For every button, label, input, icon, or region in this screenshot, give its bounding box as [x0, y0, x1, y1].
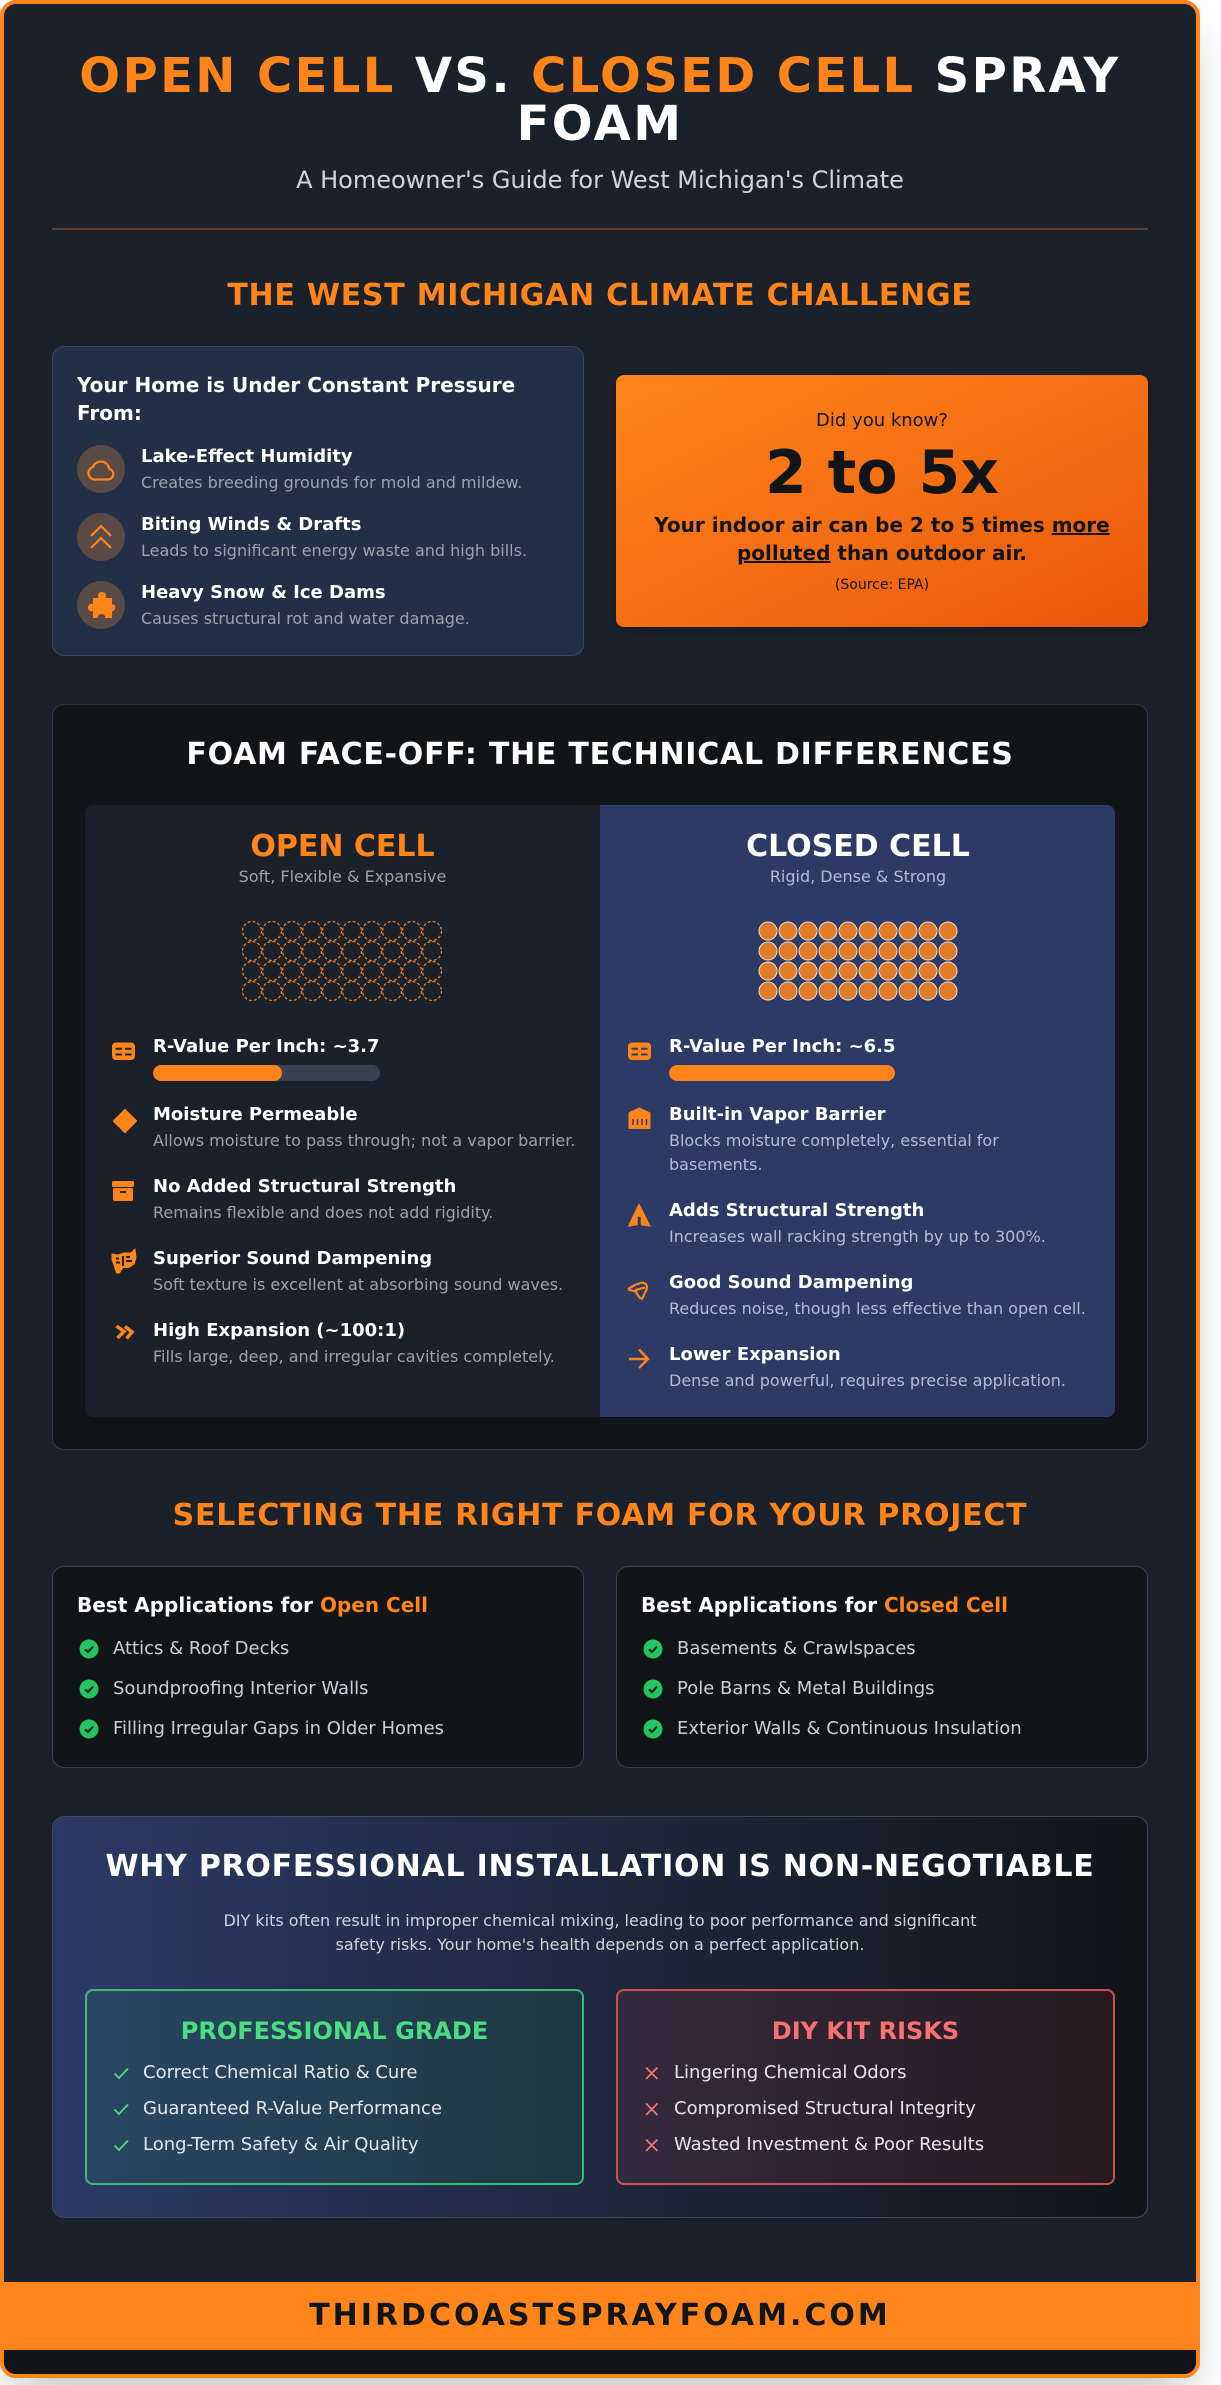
- risk item: Lingering Chemical Odors: [674, 2062, 907, 2083]
- risk item: [642, 2095, 1089, 2123]
- panel heading: From:: [77, 401, 142, 425]
- stat: expansion: [625, 1341, 1091, 1393]
- structure text: Remains flexible and does not add rigidity.: [153, 1203, 493, 1222]
- stat: vapor barrier: [628, 1104, 999, 1174]
- r-value text and bar: R-Value Per Inch: ~6.5: [669, 1036, 896, 1057]
- icon: cloud: [77, 445, 125, 493]
- text: snow: Causes structural rot and water damage.: [141, 609, 470, 628]
- structural strength text: Adds Structural Strength: [669, 1200, 924, 1221]
- benefit item: Guaranteed R-Value Performance: [143, 2098, 442, 2119]
- r-value text and bar: [669, 1036, 896, 1081]
- sound text: [153, 1248, 563, 1294]
- heading: professional installation: WHY PROFESSIONAL INSTALLATION IS NON-NEGOTIABLE: [105, 1849, 1095, 1884]
- intro text: DIY kits often result in improper chemical mixing, leading to poor performance and significant: [223, 1911, 977, 1930]
- icon: r-value: [628, 1042, 651, 1060]
- subtitle: A Homeowner's Guide for West Michigan's Climate: [296, 166, 904, 194]
- structural strength text: Increases wall racking strength by up to 300%.: [669, 1227, 1046, 1246]
- icon: diamond: [113, 1109, 137, 1133]
- structure text: [153, 1176, 493, 1222]
- source: (Source: EPA): [835, 577, 929, 593]
- text: winds: [141, 514, 527, 560]
- application item: [77, 1675, 559, 1703]
- panel heading: Best Applications for Closed Cell: [641, 1593, 1008, 1617]
- column tagline: Rigid, Dense & Strong: [770, 867, 946, 886]
- list: pressures: [77, 445, 527, 629]
- text: humidity: Lake-Effect Humidity: [141, 446, 353, 467]
- climate panels: [52, 346, 1148, 656]
- vapor barrier text: [669, 1104, 999, 1174]
- item: snow: [77, 581, 470, 629]
- big number: 2 to 5x: [765, 438, 999, 508]
- icon: double chevron up: [77, 513, 125, 561]
- application panels: [52, 1566, 1148, 1768]
- moisture text: [153, 1104, 575, 1150]
- icon: sound: [112, 1248, 136, 1274]
- stat: sound: [112, 1248, 563, 1294]
- vapor barrier text: basements.: [669, 1155, 762, 1174]
- column heading: OPEN CELL: [250, 829, 435, 864]
- column heading: CLOSED CELL: [746, 829, 970, 864]
- text: winds: Leads to significant energy waste and high bills.: [141, 541, 527, 560]
- stat: r-value: [112, 1036, 380, 1081]
- section: climate challenge: [52, 278, 1148, 656]
- application item: Attics & Roof Decks: [113, 1638, 289, 1659]
- sound text: Reduces noise, though less effective than open cell.: [669, 1299, 1086, 1318]
- text: snow: Heavy Snow & Ice Dams: [141, 582, 386, 603]
- diagram: open cell structure: [242, 921, 442, 1001]
- header: [52, 52, 1148, 230]
- expansion text: [153, 1320, 555, 1366]
- benefit item: Correct Chemical Ratio & Cure: [143, 2062, 417, 2083]
- footer band: website: [4, 2282, 1196, 2350]
- expansion text: Dense and powerful, requires precise application.: [669, 1371, 1066, 1390]
- application item: Pole Barns & Metal Buildings: [677, 1678, 935, 1699]
- structural strength text: [669, 1200, 1046, 1246]
- r-value text and bar: [153, 1036, 380, 1081]
- title: OPEN CELL VS. CLOSED CELL SPRAY FOAM: [79, 48, 1121, 152]
- icon: sound: [625, 1273, 653, 1301]
- stat: r-value: [628, 1036, 896, 1081]
- callout text: polluted than outdoor air.: [737, 541, 1027, 565]
- text: humidity: [141, 446, 522, 492]
- column: closed cell: [600, 805, 1115, 1417]
- heading: selecting foam: SELECTING THE RIGHT FOAM FOR YOUR PROJECT: [173, 1498, 1027, 1533]
- diagram: closed cell structure: [758, 922, 958, 1000]
- panel heading: [76, 373, 515, 425]
- stat: sound: [628, 1272, 1086, 1318]
- panel: open cell applications: [52, 1566, 584, 1768]
- application item: [641, 1715, 1123, 1743]
- benefit list: [111, 2059, 558, 2159]
- panel: closed cell applications: [616, 1566, 1148, 1768]
- expansion text: Fills large, deep, and irregular cavities completely.: [153, 1347, 555, 1366]
- panel: foam face-off: [52, 704, 1148, 1450]
- panel heading: Best Applications for Open Cell: [77, 1593, 428, 1617]
- sound text: Good Sound Dampening: [669, 1272, 913, 1293]
- icon: puzzle piece: [77, 581, 125, 629]
- application item: [77, 1715, 559, 1743]
- icon: triangle: [628, 1204, 651, 1227]
- section: selecting foam: [52, 1498, 1148, 1768]
- comparison boxes: [85, 1989, 1115, 2185]
- callout lead: Did you know?: [816, 410, 948, 431]
- heading: face-off: FOAM FACE-OFF: THE TECHNICAL DIFFERENCES: [186, 737, 1014, 772]
- stat: structural strength: [628, 1200, 1046, 1246]
- column tagline: Soft, Flexible & Expansive: [239, 867, 446, 886]
- text: snow: [141, 582, 470, 628]
- application item: [641, 1675, 1123, 1703]
- text: humidity: Creates breeding grounds for mold and mildew.: [141, 473, 522, 492]
- risk list: [642, 2059, 1089, 2159]
- application item: Basements & Crawlspaces: [677, 1638, 916, 1659]
- sound text: Superior Sound Dampening: [153, 1248, 432, 1269]
- icon: arrow: [625, 1345, 653, 1373]
- risk item: [642, 2131, 1089, 2159]
- application item: Exterior Walls & Continuous Insulation: [677, 1718, 1022, 1739]
- intro text: [85, 1909, 1115, 1957]
- r-value text and bar: R-Value Per Inch: ~3.7: [153, 1036, 380, 1057]
- column: open cell: [85, 805, 600, 1417]
- callout: indoor air statistic: [616, 375, 1148, 627]
- moisture text: Moisture Permeable: [153, 1104, 358, 1125]
- panel: constant pressure: [52, 346, 584, 656]
- stat: expansion: [116, 1320, 555, 1366]
- icon: box: [112, 1181, 134, 1201]
- comparison columns: [85, 805, 1115, 1417]
- sound text: Soft texture is excellent at absorbing sound waves.: [153, 1275, 563, 1294]
- box heading: DIY KIT RISKS: [772, 2017, 959, 2045]
- stat: structure: [112, 1176, 493, 1222]
- panel heading: Your Home is Under Constant Pressure: [77, 373, 515, 397]
- intro text: safety risks. Your home's health depends on a perfect application.: [336, 1935, 864, 1954]
- vapor barrier text: Blocks moisture completely, essential for: [669, 1131, 999, 1150]
- list: open cell applications: [77, 1635, 559, 1743]
- application item: [641, 1635, 1123, 1663]
- risk item: [642, 2059, 1089, 2087]
- application item: Soundproofing Interior Walls: [113, 1678, 368, 1699]
- expansion text: [669, 1341, 1066, 1393]
- benefit item: [111, 2131, 558, 2159]
- footer band: website: THIRDCOASTSPRAYFOAM.COM: [309, 2298, 891, 2333]
- box: diy risks: [616, 1989, 1115, 2185]
- list: closed cell applications: [641, 1635, 1123, 1743]
- vapor barrier text: Built-in Vapor Barrier: [669, 1104, 886, 1125]
- sound text: [669, 1269, 1086, 1321]
- icon: r-value: [112, 1042, 135, 1060]
- callout text: Your indoor air can be 2 to 5 times more: [654, 513, 1110, 537]
- icon: double chevron right: [116, 1324, 134, 1340]
- risk item: Compromised Structural Integrity: [674, 2098, 976, 2119]
- heading: climate challenge: THE WEST MICHIGAN CLIMATE CHALLENGE: [227, 278, 973, 313]
- item: winds: [77, 513, 527, 561]
- application item: [77, 1635, 559, 1663]
- box: professional grade: [85, 1989, 584, 2185]
- stat: moisture: [113, 1104, 575, 1150]
- benefit item: Long-Term Safety & Air Quality: [143, 2134, 419, 2155]
- footer base: [4, 2350, 1196, 2378]
- box heading: PROFESSIONAL GRADE: [181, 2017, 488, 2045]
- expansion text: Lower Expansion: [669, 1344, 841, 1365]
- benefit item: [111, 2095, 558, 2123]
- text: winds: Biting Winds & Drafts: [141, 514, 361, 535]
- moisture text: Allows moisture to pass through; not a vapor barrier.: [153, 1131, 575, 1150]
- benefit item: [111, 2059, 558, 2087]
- icon: warehouse: [628, 1108, 650, 1129]
- risk item: Wasted Investment & Poor Results: [674, 2134, 984, 2155]
- panel: professional installation: [52, 1816, 1148, 2218]
- callout text: [654, 513, 1110, 565]
- application item: Filling Irregular Gaps in Older Homes: [113, 1718, 444, 1739]
- item: humidity: [77, 445, 522, 493]
- structure text: No Added Structural Strength: [153, 1176, 456, 1197]
- expansion text: High Expansion (~100:1): [153, 1320, 405, 1341]
